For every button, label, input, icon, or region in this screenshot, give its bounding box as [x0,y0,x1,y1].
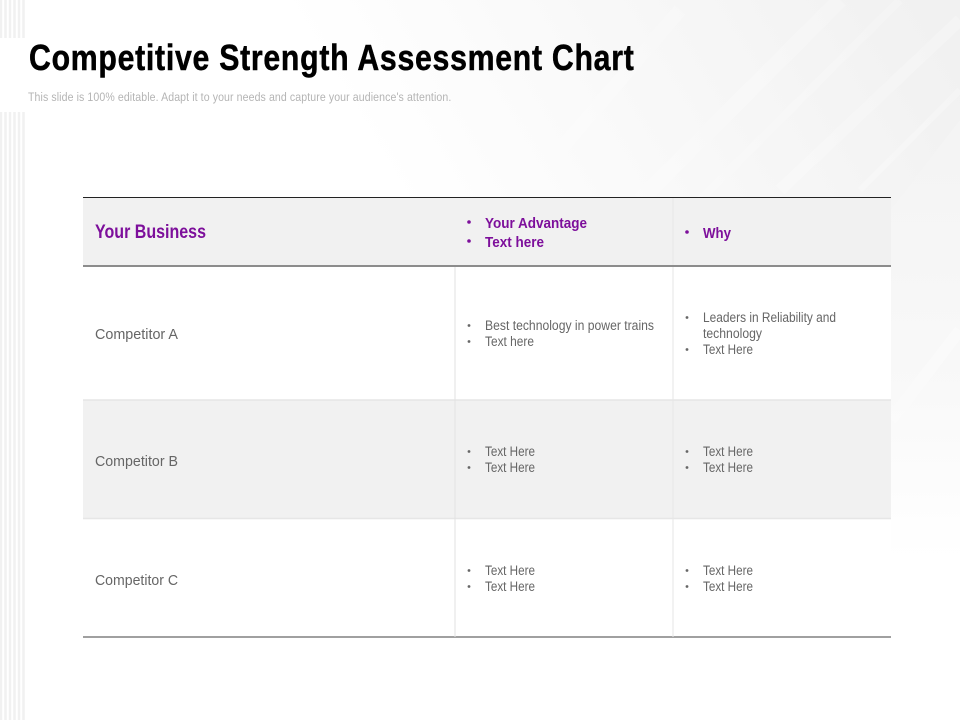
competitor C why [686,563,753,594]
competitor A advantage: Text here [485,334,534,349]
competitor B label: Competitor B [95,454,178,470]
subtitle: This slide is 100% editable. Adapt it to your needs and capture your audience's attention. [28,91,451,104]
header: your business: Your Business [95,222,206,243]
competitor B why: Text Here [703,444,753,459]
competitor B advantage: Text Here [485,444,535,459]
competitor A label: Competitor A [95,327,178,343]
row: competitor B [83,400,891,518]
competitor B why [686,444,753,475]
competitor C why: Text Here [703,563,753,578]
header row [83,198,891,266]
competitor B why: Text Here [703,460,753,475]
row: competitor A [83,267,891,400]
competitor C advantage [468,563,535,594]
table [83,198,891,637]
competitor B advantage [468,444,535,475]
header: your advantage list: Your Advantage [485,215,587,232]
competitor C label: Competitor C [95,573,178,589]
competitor A why: Text Here [703,342,753,357]
competitor B advantage: Text Here [485,460,535,475]
competitor A advantage [468,318,654,349]
competitor A why [686,310,836,357]
header: your advantage list [467,215,587,251]
competitor A advantage: Best technology in power trains [485,318,654,333]
header: why list [685,225,732,242]
competitor C why: Text Here [703,579,753,594]
competitor C advantage: Text Here [485,579,535,594]
header: why list: Why [703,225,732,242]
title: Competitive Strength Assessment Chart [29,39,634,79]
competitor C advantage: Text Here [485,563,535,578]
row: competitor C [83,518,891,637]
competitor A why: Leaders in Reliability and [703,310,836,325]
competitor A why: technology [703,326,762,341]
header: your advantage list: Text here [485,234,544,251]
